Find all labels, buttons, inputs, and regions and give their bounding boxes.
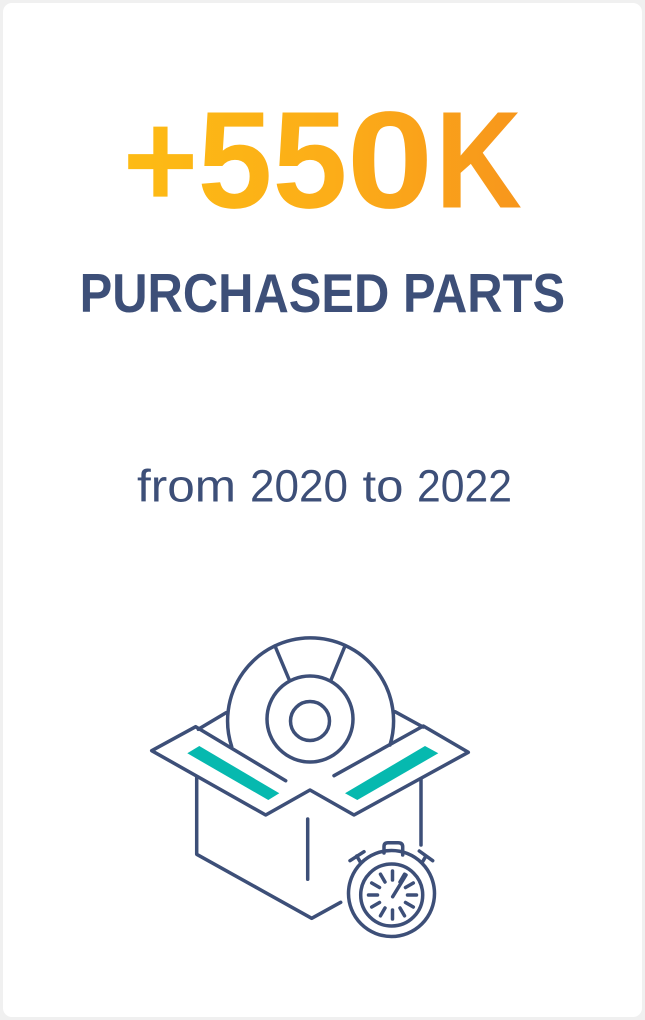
box flaps (152, 712, 468, 815)
big number: 5 (272, 84, 347, 238)
big number: 5 (198, 84, 272, 238)
date range: 2020 (250, 460, 348, 512)
box body (197, 777, 421, 918)
big number: + (123, 84, 198, 238)
big number: 0 (347, 84, 433, 238)
teal flap stripes (187, 746, 438, 800)
date range (137, 460, 512, 512)
icon: stopwatch (348, 843, 434, 936)
date range: to (362, 460, 404, 512)
date range: 2022 (417, 460, 512, 512)
big number: K (435, 84, 522, 238)
big number (123, 84, 522, 238)
part: disc (228, 638, 394, 762)
icon: open box with part and stopwatch (152, 638, 468, 936)
heading: PURCHASED PARTS (80, 262, 565, 324)
date range: from (137, 460, 236, 512)
